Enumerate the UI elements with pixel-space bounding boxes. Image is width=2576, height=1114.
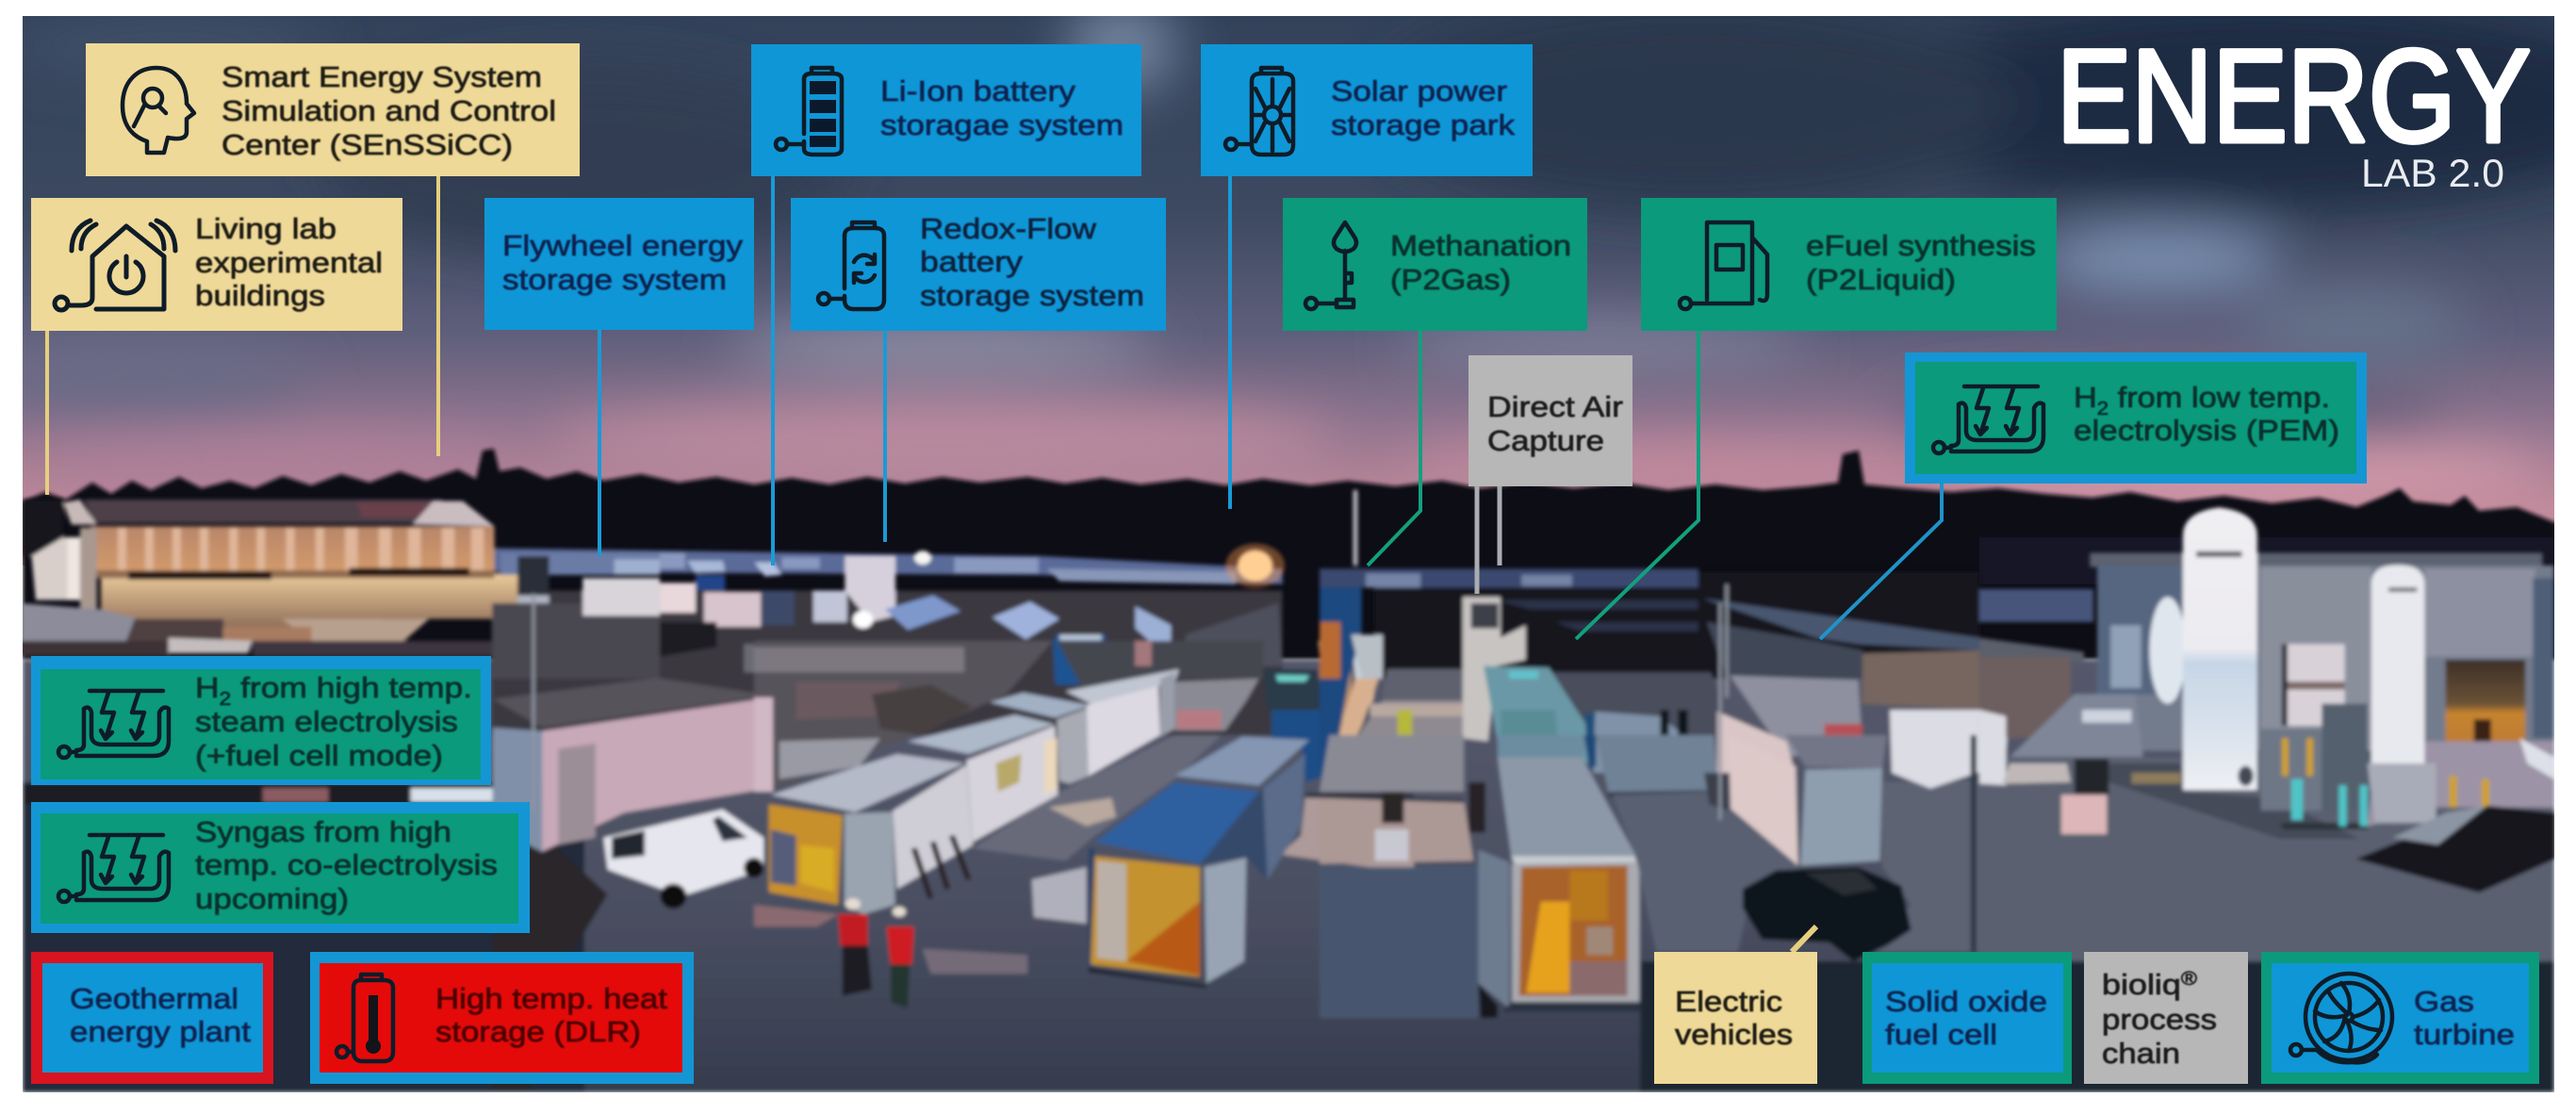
- label text: [920, 212, 1144, 312]
- label text: Solid oxide: [1885, 985, 2047, 1018]
- label text: Redox-Flow: [920, 212, 1097, 245]
- ground: [1863, 779, 2074, 952]
- icon: head with gear: [123, 68, 194, 153]
- leader: SEnSSiCC: [436, 176, 440, 456]
- panel: Flywheel energy storage system: [484, 198, 754, 330]
- label text: H: [2074, 381, 2094, 414]
- label text: [1885, 985, 2047, 1051]
- middle container: [908, 714, 1055, 754]
- label text: from high temp.: [231, 671, 472, 704]
- leader: li-ion: [771, 176, 775, 565]
- label text: Simulation and Control: [222, 94, 556, 127]
- warm pathway: [1280, 798, 1414, 874]
- small cryo tank: [2371, 565, 2424, 763]
- gas cylinder bundle and teal pipes: [2259, 704, 2489, 829]
- label text: [880, 74, 1124, 141]
- label text: Center (SEnSSiCC): [222, 128, 513, 161]
- icon: flow battery: [818, 222, 884, 309]
- label text: storagae system: [880, 108, 1124, 141]
- panel: Methanation (P2Gas): [1283, 198, 1587, 331]
- panel: Gas turbine: [2261, 952, 2539, 1084]
- front open container: [771, 754, 964, 812]
- icon: turbine wheel: [2290, 974, 2392, 1062]
- panel: Smart Energy System Simulation and Control Center: [86, 43, 580, 176]
- label text: [195, 212, 383, 312]
- icon: fuel pump: [1680, 222, 1767, 309]
- label text: High temp. heat: [435, 982, 667, 1015]
- label text: electrolysis (PEM): [2074, 414, 2339, 447]
- leader: redox flow: [883, 331, 887, 542]
- label text: Gas: [2414, 985, 2474, 1018]
- strip between left panels: [25, 678, 772, 1089]
- panel: Living lab experimental buildings: [31, 198, 402, 331]
- label text: Li-Ion battery: [880, 74, 1076, 107]
- label text: storage system: [502, 263, 727, 296]
- ground: [23, 660, 2554, 1092]
- dark electric car: [1743, 867, 1911, 961]
- logo: Energy Lab 2.0: LAB 2.0: [2361, 151, 2504, 195]
- leader: electric vehicles: [1792, 926, 1816, 952]
- label text: Flywheel energy: [502, 229, 744, 262]
- dark earth beside the van: [493, 770, 608, 1089]
- panel: Redox-Flow battery storage system: [791, 198, 1166, 331]
- label text: buildings: [195, 279, 325, 312]
- panel: High temp heat storage (DLR): [310, 952, 694, 1084]
- label text: [2102, 968, 2217, 1070]
- leader: direct air capture: [1477, 486, 1500, 594]
- dark hut: [1979, 638, 2084, 663]
- label text: 2: [220, 689, 231, 710]
- label text: [1390, 229, 1571, 296]
- icon: electrolysis: [58, 835, 169, 902]
- far container: [990, 693, 1091, 718]
- label text: storage park: [1331, 108, 1516, 141]
- label text: [1675, 985, 1793, 1051]
- label text: chain: [2102, 1037, 2180, 1070]
- label text: Electric: [1675, 985, 1782, 1018]
- panel: H2 from low temp electrolysis (PEM): [1905, 352, 2367, 483]
- icon: electrolysis: [58, 691, 169, 758]
- warm road: [1320, 735, 1464, 792]
- lamp poles: [533, 490, 1727, 820]
- dark left ground: [23, 782, 584, 1092]
- label text: [435, 982, 667, 1048]
- forecourt: [2002, 763, 2071, 784]
- dark roof building: [1702, 598, 1979, 650]
- label text: turbine: [2414, 1018, 2515, 1051]
- clouds: [0, 0, 2576, 494]
- bottom dark ground under right panels: [1640, 961, 2554, 1092]
- label text: [1487, 390, 1623, 457]
- two workers in red: [838, 898, 914, 1008]
- label text: experimental: [195, 246, 383, 279]
- label text: energy plant: [70, 1015, 251, 1048]
- label text: upcoming): [195, 882, 349, 915]
- panel: Li-Ion battery storage system: [751, 44, 1141, 176]
- living lab wooden building: [21, 500, 660, 679]
- label text: battery: [920, 245, 1024, 278]
- label text: [1806, 229, 2036, 296]
- label text: Smart Energy System: [222, 60, 542, 93]
- panel: Direct Air Capture: [1468, 355, 1633, 486]
- label text: temp. co-electrolysis: [195, 848, 498, 881]
- panel: Syngas from high temp co-electrolysis: [31, 802, 530, 933]
- leader lines: [47, 176, 1942, 952]
- label text: process: [2102, 1003, 2217, 1036]
- forklift with pallet: [2061, 759, 2108, 834]
- icon: battery: [776, 68, 842, 155]
- label text: [2414, 985, 2515, 1051]
- panel: eFuel synthesis (P2Liquid): [1641, 198, 2057, 331]
- label text: Direct Air: [1487, 390, 1623, 423]
- label text: [195, 815, 498, 915]
- panel: H2 from high temp steam electrolysis: [31, 656, 491, 785]
- label text: Syngas from high: [195, 815, 451, 848]
- label text: Solar power: [1331, 74, 1507, 107]
- slab: [1596, 735, 1718, 792]
- label text: steam electrolysis: [195, 705, 458, 738]
- white plant wall: [1729, 735, 1798, 865]
- fence: [1174, 679, 1259, 730]
- label text: H: [195, 671, 216, 704]
- panel: Solar power storage park: [1201, 44, 1533, 176]
- icon: electrolysis: [1933, 386, 2043, 453]
- label text: [70, 982, 251, 1048]
- label text: Capture: [1487, 424, 1604, 457]
- label text: (+fuel cell mode): [195, 739, 443, 772]
- icon: methane flame valve: [1305, 222, 1356, 309]
- label text: 2: [2097, 399, 2108, 419]
- panel: Electric vehicles: [1654, 952, 1817, 1084]
- leader: solar park: [1228, 176, 1232, 509]
- label text: [195, 671, 472, 772]
- panel: Geothermal energy plant: [31, 952, 273, 1084]
- leader: methanation: [1368, 331, 1420, 565]
- label text: ®: [2181, 969, 2197, 990]
- grey roof service building: [493, 678, 772, 852]
- sky: [23, 16, 2554, 565]
- row of containers, blue containers and workers: [754, 641, 1414, 1008]
- blue roof container: [1174, 737, 1309, 785]
- cryo storage yard: [1979, 507, 2554, 961]
- leader: living lab: [45, 331, 49, 495]
- ground: [1979, 757, 2554, 961]
- label text: from low temp.: [2108, 381, 2330, 414]
- building: [2090, 553, 2542, 567]
- scooters: [914, 836, 969, 898]
- icon: smart house: [55, 221, 175, 310]
- treeline: [23, 449, 2559, 660]
- warm floor spots: [754, 905, 838, 926]
- label text: Geothermal: [70, 982, 238, 1015]
- label text: storage system: [920, 279, 1144, 312]
- long container: [1498, 735, 1589, 757]
- label text: (P2Gas): [1390, 263, 1511, 296]
- label text: bioliq: [2102, 968, 2170, 1001]
- label text: storage (DLR): [435, 1015, 641, 1048]
- road: [973, 735, 1222, 860]
- white van: [603, 810, 763, 909]
- plant towers: [1272, 710, 1326, 782]
- site ground and structures: [21, 490, 2555, 1092]
- label text: fuel cell: [1885, 1018, 1997, 1051]
- icon: thermometer battery: [336, 975, 393, 1061]
- grey and white plant containers: [1730, 676, 1862, 757]
- panel: Solid oxide fuel cell: [1862, 952, 2072, 1084]
- mid ground left, gravel and solar band: [491, 544, 1285, 735]
- leader: eFuel: [1576, 331, 1698, 639]
- front central container, car and ground: [1320, 735, 2074, 1018]
- leader: PEM: [1820, 483, 1942, 639]
- label text: [1331, 74, 1516, 141]
- label text: Living lab: [195, 212, 336, 245]
- panel: bioliq process chain: [2084, 952, 2248, 1084]
- label text: vehicles: [1675, 1018, 1793, 1051]
- ground right of container: [1613, 792, 1800, 952]
- label text: [222, 60, 556, 161]
- central plant: [1320, 568, 1979, 773]
- label text: [2074, 381, 2339, 447]
- label text: eFuel synthesis: [1806, 229, 2036, 262]
- label text: [502, 229, 744, 296]
- black ground mat: [2355, 806, 2555, 893]
- label text: (P2Liquid): [1806, 263, 1956, 296]
- leader: flywheel: [598, 330, 601, 556]
- large cryo tank: [2183, 507, 2257, 790]
- label text: Methanation: [1390, 229, 1571, 262]
- icon: solar cell battery: [1225, 68, 1293, 155]
